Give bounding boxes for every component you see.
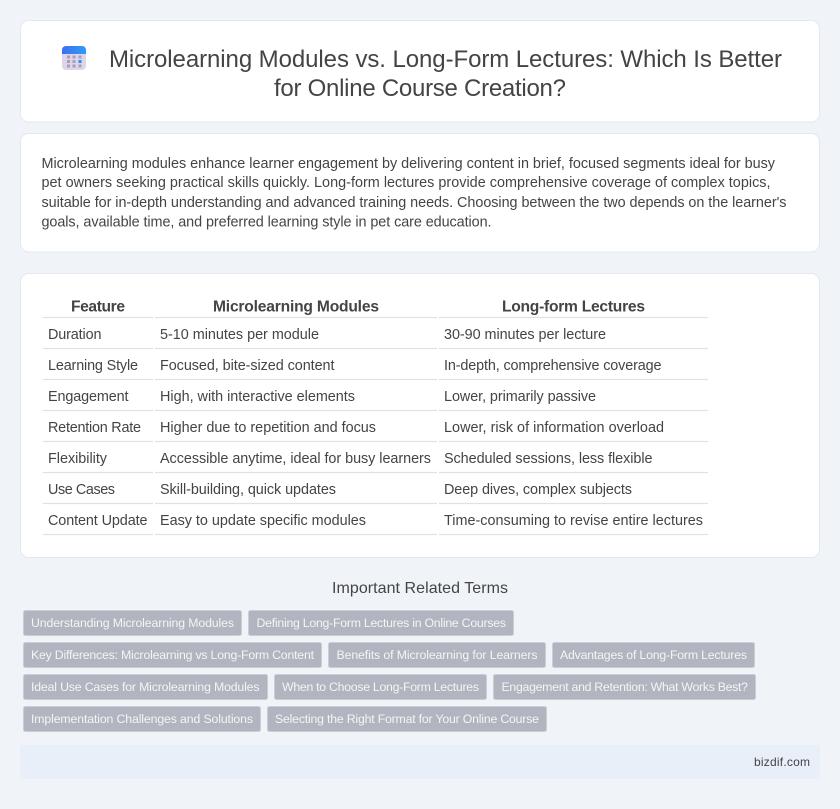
row: Duration: 30-90 minutes per lecture	[444, 327, 606, 343]
header panel	[20, 20, 820, 122]
row: Flexibility: Flexibility	[48, 451, 108, 467]
row: Use Cases	[48, 482, 632, 498]
row: Engagement: Engagement	[48, 389, 128, 405]
row: Content Update: Content Update	[48, 513, 148, 529]
row: Use Cases: Use Cases	[48, 482, 115, 498]
row: Engagement: High, with interactive elements	[160, 389, 355, 405]
row: Flexibility: Accessible anytime, ideal for busy learners	[160, 451, 431, 467]
title	[109, 46, 782, 102]
summary paragraph: pet owners seeking practical skills quickly. Long-form lectures provide comprehensive coverage of complex topics,	[42, 175, 770, 191]
row: Content Update	[48, 513, 703, 529]
footer	[20, 745, 820, 779]
table header row: Microlearning Modules	[213, 298, 379, 316]
row: Learning Style: Learning Style	[48, 358, 138, 374]
related terms tags: Defining Long-Form Lectures in Online Courses	[256, 616, 506, 630]
table header row	[71, 298, 645, 316]
related terms tags: Engagement and Retention: What Works Best?	[502, 680, 748, 694]
summary paragraph: goals, available time, and preferred learning style in pet care education.	[42, 214, 492, 230]
row: Flexibility: Scheduled sessions, less flexible	[444, 451, 652, 467]
related terms tags: When to Choose Long-Form Lectures	[282, 680, 479, 694]
row: Engagement: Lower, primarily passive	[444, 389, 596, 405]
row: Use Cases: Deep dives, complex subjects	[444, 482, 632, 498]
row: Retention Rate: Higher due to repetition and focus	[160, 420, 376, 436]
related terms tags: Understanding Microlearning Modules	[31, 616, 234, 630]
table header row: Long-form Lectures	[502, 298, 645, 316]
related terms tags: Benefits of Microlearning for Learners	[336, 648, 538, 662]
row: Retention Rate: Lower, risk of information overload	[444, 420, 664, 436]
row: Learning Style: In-depth, comprehensive coverage	[444, 358, 662, 374]
related terms tags	[24, 610, 756, 732]
panel: summary	[20, 134, 820, 252]
icon: calendar	[62, 46, 86, 70]
row: Learning Style: Focused, bite-sized content	[160, 358, 334, 374]
title: for Online Course Creation?	[274, 75, 566, 102]
row: Flexibility	[48, 451, 652, 467]
table header row: Feature	[71, 298, 125, 316]
row: Engagement	[48, 389, 596, 405]
row: Duration: 5-10 minutes per module	[160, 327, 319, 343]
row: Learning Style	[48, 358, 662, 374]
summary paragraph: suitable for in-depth understanding and advanced training needs. Choosing between the two depends on the learner's	[42, 195, 786, 211]
row: Content Update: Easy to update specific modules	[160, 513, 366, 529]
row: Duration: Duration	[48, 327, 102, 343]
row: Content Update: Time-consuming to revise entire lectures	[444, 513, 703, 529]
related terms tags: Advantages of Long-Form Lectures	[560, 648, 747, 662]
row: Retention Rate: Retention Rate	[48, 420, 141, 436]
related terms heading: Important Related Terms	[332, 580, 508, 597]
panel: comparison table	[20, 274, 820, 558]
row: Duration	[48, 327, 606, 343]
related terms tags: Implementation Challenges and Solutions	[31, 712, 253, 726]
summary paragraph	[42, 156, 786, 230]
related terms tags: Selecting the Right Format for Your Online Course	[275, 712, 539, 726]
row: Use Cases: Skill-building, quick updates	[160, 482, 336, 498]
related terms tags: Ideal Use Cases for Microlearning Modules	[31, 680, 260, 694]
footer credit: bizdif.com	[754, 755, 810, 769]
related terms tags: Key Differences: Microlearning vs Long-Form Content	[31, 648, 315, 662]
summary paragraph: Microlearning modules enhance learner engagement by delivering content in brief, focused segments ideal for busy	[42, 156, 776, 172]
row: Retention Rate	[48, 420, 664, 436]
title: Microlearning Modules vs. Long-Form Lectures: Which Is Better	[109, 46, 782, 73]
